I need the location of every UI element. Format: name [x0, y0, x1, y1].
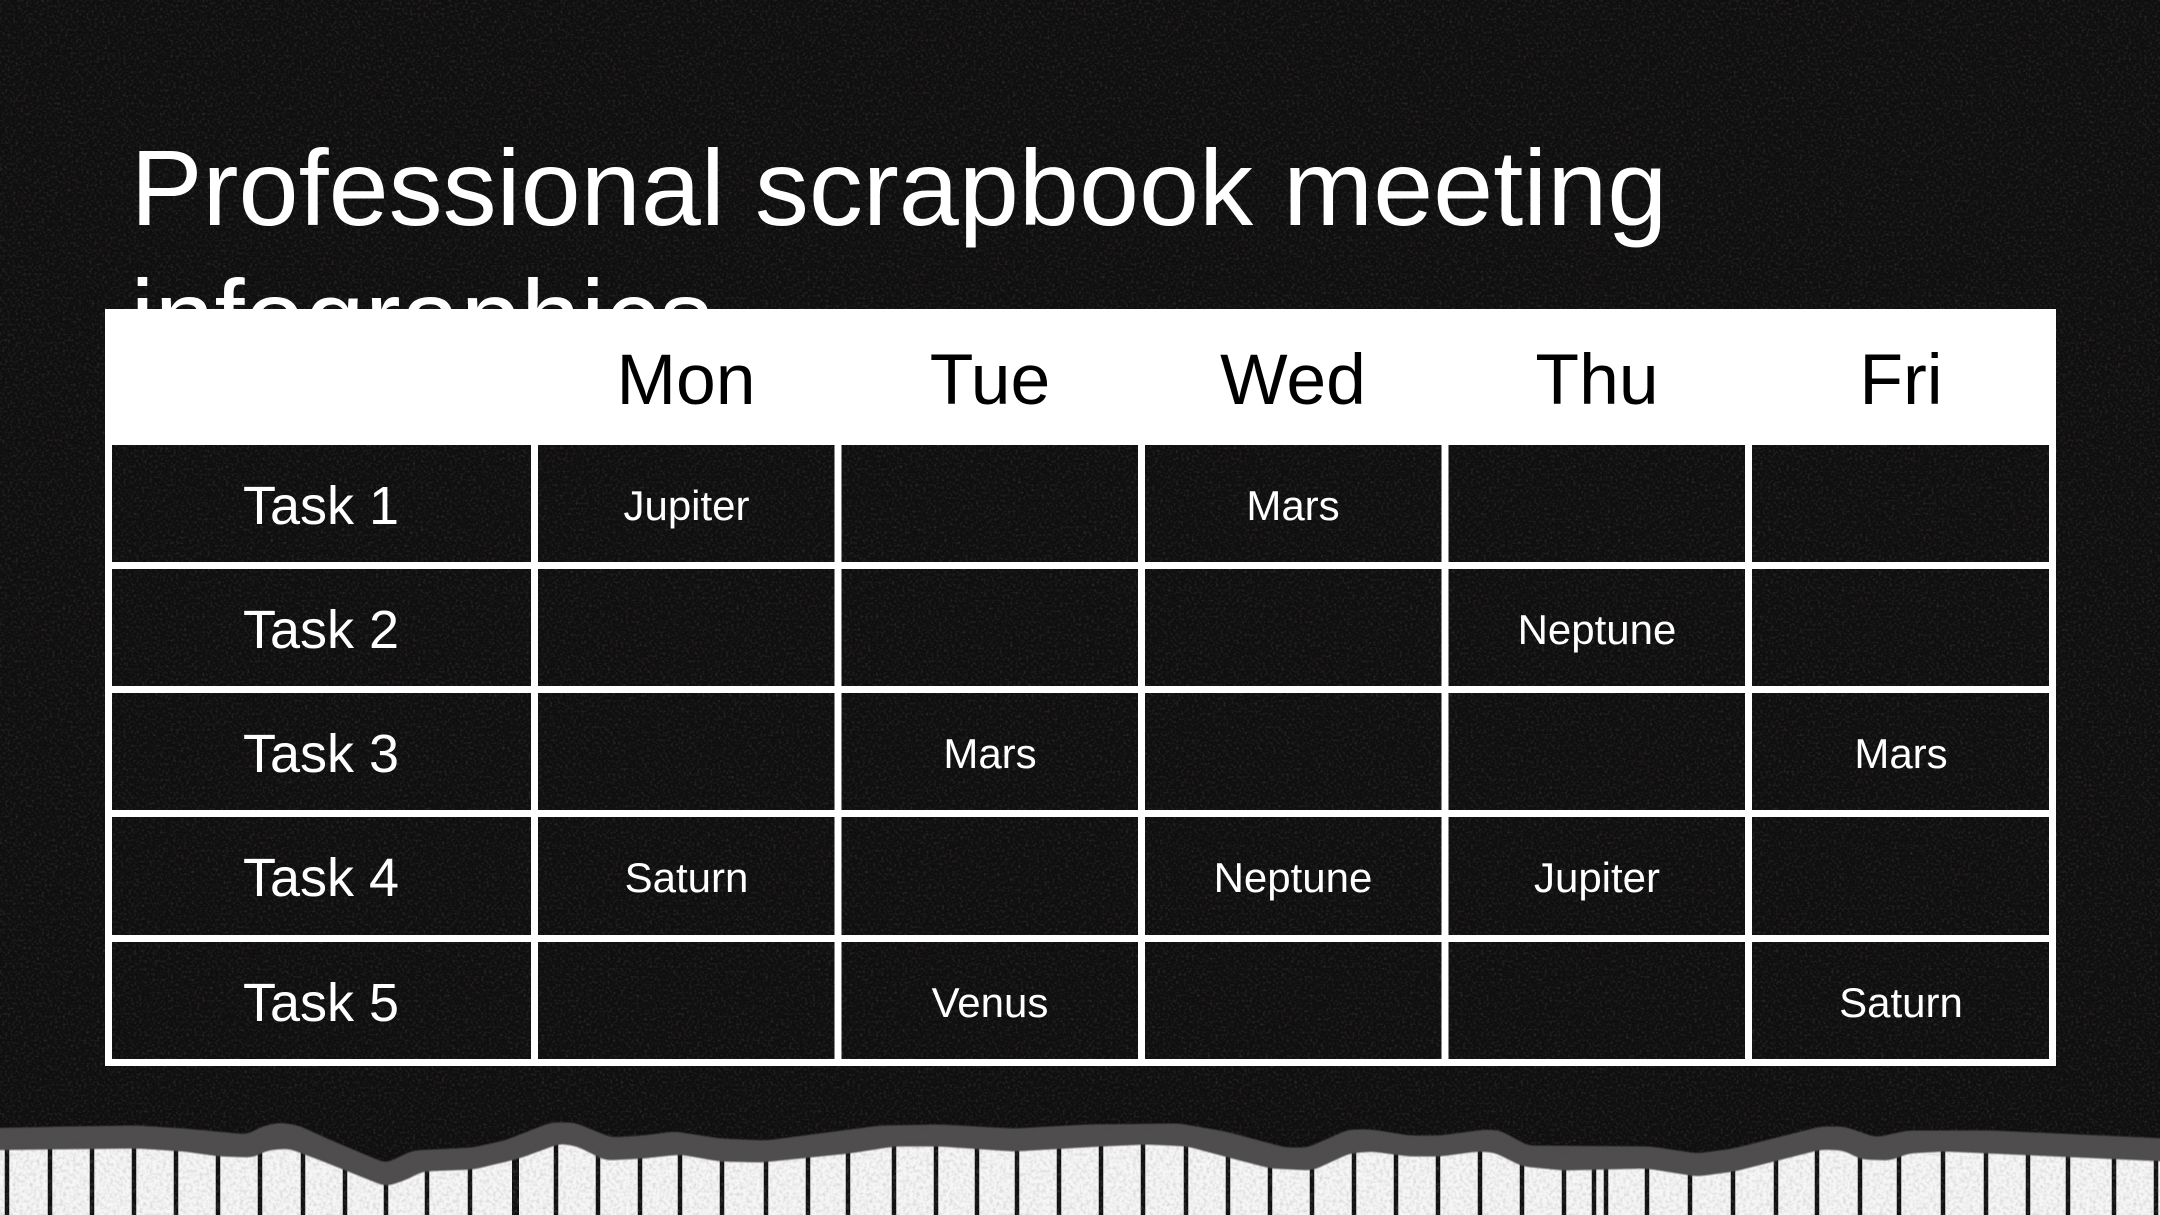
table header row: Fri	[1859, 340, 1943, 420]
table grid lines	[105, 445, 2056, 1066]
table cell entries: Venus	[932, 979, 1048, 1026]
table header row: Thu	[1535, 340, 1659, 420]
table cell entries	[623, 482, 1963, 1026]
table header row: Tue	[930, 340, 1050, 420]
schedule table	[105, 309, 2056, 1066]
table cell entries: Mars	[1246, 482, 1340, 529]
task labels: Task 3	[243, 724, 399, 784]
task labels	[243, 476, 399, 1033]
torn edge band	[0, 1125, 2160, 1184]
title: Professional scrapbook meeting	[130, 127, 1667, 248]
lined paper	[0, 1144, 2160, 1215]
table cell entries: Mars	[943, 730, 1037, 777]
table cell entries: Neptune	[1518, 606, 1676, 653]
table cell entries: Jupiter	[623, 482, 750, 529]
torn paper strip	[0, 1122, 2160, 1215]
table cell entries: Saturn	[1839, 979, 1963, 1026]
task labels: Task 2	[243, 600, 399, 660]
table cell entries: Neptune	[1214, 854, 1372, 901]
table cell entries: Saturn	[625, 854, 748, 901]
table cell entries: Jupiter	[1534, 854, 1660, 901]
table header row: Mon	[616, 340, 756, 420]
table header row: Wed	[1220, 340, 1366, 420]
task labels: Task 1	[243, 476, 399, 536]
table header row	[105, 309, 2056, 445]
task labels: Task 4	[243, 848, 399, 908]
title: infographics	[130, 257, 713, 378]
task labels: Task 5	[243, 973, 399, 1033]
table cell entries: Mars	[1854, 730, 1948, 777]
